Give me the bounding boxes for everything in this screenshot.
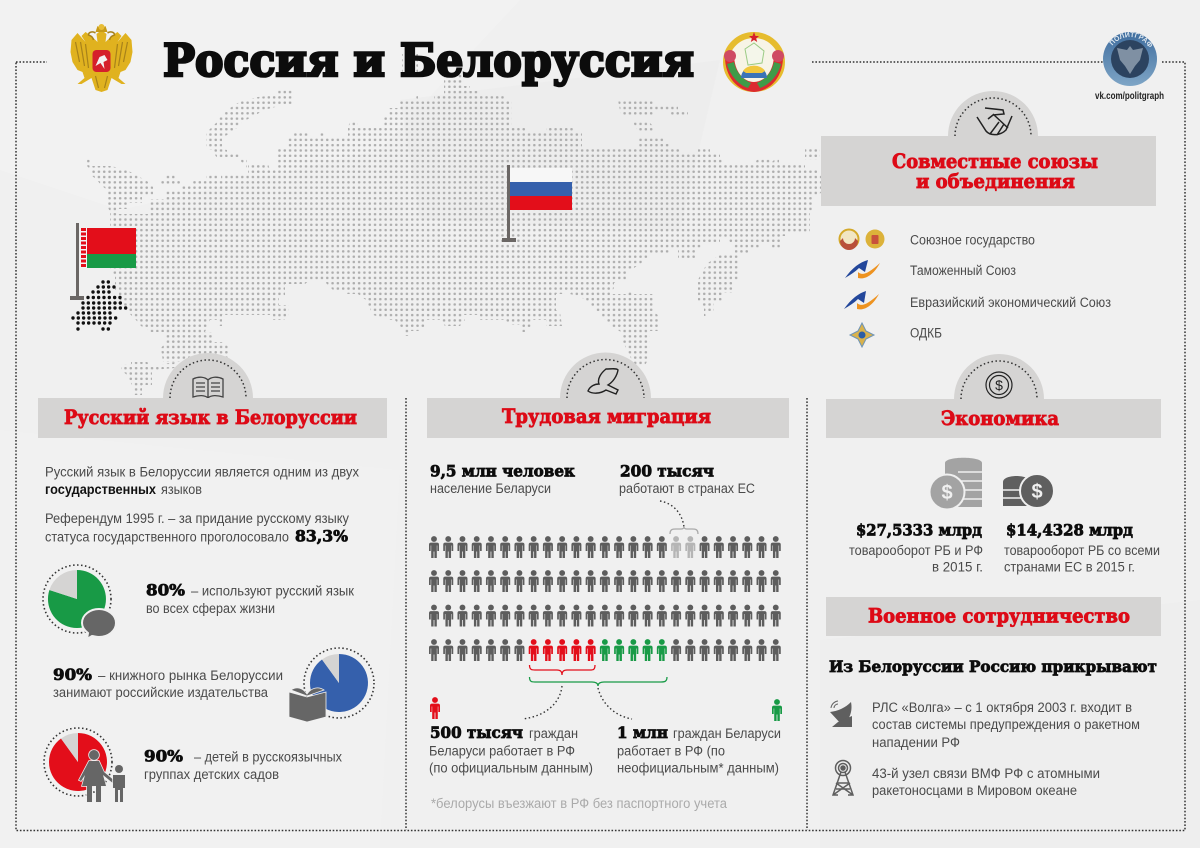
stat: trade with EU: товарооборот РБ со всеми (1004, 543, 1160, 558)
flag: Russia (502, 165, 572, 242)
stat: trade with Russia: в 2015 г. (932, 560, 983, 575)
stat: 500 thousand: Беларуси работает в РФ (429, 744, 575, 759)
panel: economy (826, 354, 1161, 575)
icon: customs union (845, 260, 880, 278)
logo eagle (1117, 46, 1143, 74)
stat: 500 thousand (429, 723, 593, 776)
footnote: *белорусы въезжают в РФ без паспортного учета (431, 796, 727, 811)
label: Евразийский экономический Союз (910, 295, 1111, 310)
icon: radar (830, 701, 852, 727)
text: 90 percent books: – книжного рынка Белоруссии (98, 668, 283, 683)
text: 90 percent books: занимают российские издательства (53, 685, 268, 700)
icon: short coin stack (1003, 474, 1054, 508)
stat: 500 thousand: 500 тысяч (430, 723, 523, 742)
stat: 1 million: 1 млн (617, 723, 668, 742)
icon: Russian arms small (866, 230, 884, 248)
icon: green person (772, 699, 782, 721)
text: 90 percent children (144, 747, 342, 782)
icon: speech bubble (82, 609, 116, 639)
heading text: и объединения (916, 170, 1075, 193)
stat: 1 million: работает в РФ (по (617, 744, 725, 759)
people grid (429, 536, 781, 661)
red bracket (530, 665, 595, 675)
text: radar: нападении РФ (872, 735, 960, 750)
green bracket (530, 677, 667, 686)
logo: politgraph (1095, 32, 1164, 102)
tab (948, 91, 1038, 136)
heading (821, 136, 1156, 206)
heading (826, 597, 1161, 636)
stat: EU workers: 200 тысяч (620, 462, 714, 481)
title: Россия и Белоруссия (163, 34, 694, 87)
icon: mother and child (79, 750, 125, 802)
referendum text: статуса государственного проголосовало (45, 530, 289, 545)
referendum text: 83,3% (295, 527, 348, 546)
icon: radio tower (833, 760, 853, 795)
heading text: Трудовая миграция (502, 405, 711, 428)
stat: 500 thousand: граждан (529, 726, 578, 741)
panel: labour migration (427, 353, 789, 811)
icon: tall coin stack: $ (941, 482, 953, 504)
label: ОДКБ (910, 326, 942, 340)
referendum text (45, 511, 349, 546)
logo: politgraph: ПОЛИТГРАФ (1109, 32, 1152, 47)
panel: Russian language (38, 353, 387, 802)
icon: CSTO (850, 323, 874, 347)
heading (427, 398, 789, 438)
pie: 80 percent (43, 565, 116, 639)
tab (163, 353, 253, 398)
subheading: Из Белоруссии Россию прикрывают (829, 657, 1157, 676)
stat: EU workers (619, 462, 755, 496)
stat: 1 million: граждан Беларуси (673, 726, 781, 741)
intro text (45, 465, 359, 497)
label: Союзное государство (910, 232, 1035, 248)
stat: trade with EU: $14,4328 млрд (1006, 521, 1133, 540)
intro text: Русский язык в Белоруссии является одним из двух (45, 465, 359, 480)
intro text: языков (161, 482, 202, 497)
icon: tall coin stack (930, 458, 982, 510)
Belarus dot map (73, 282, 127, 329)
text: comms node: 43-й узел связи ВМФ РФ с атомными (872, 766, 1100, 781)
panel: military cooperation (826, 597, 1161, 798)
stat: population (430, 462, 575, 496)
icon: book (289, 688, 326, 722)
text: 90 percent books (53, 665, 283, 700)
icon: dollar coin (986, 372, 1012, 398)
pie: 90 percent children (44, 728, 125, 802)
stat: trade with Russia: товарооборот РБ и РФ (849, 543, 983, 558)
text: 80 percent: – используют русский язык (191, 584, 354, 599)
text: radar: РЛС «Волга» – с 1 октября 2003 г. входит в (872, 700, 1132, 715)
heading text: Русский язык в Белоруссии (64, 406, 357, 429)
icon: Belarus arms small (840, 230, 858, 250)
text: radar (872, 700, 1140, 750)
stat: trade with Russia: $27,5333 млрд (856, 521, 982, 540)
icon: bird (588, 369, 618, 394)
icon: short coin stack: $ (1031, 481, 1043, 503)
text: 90 percent children: группах детских садов (144, 767, 279, 782)
text: 90 percent children: 90% (144, 747, 183, 766)
text: 90 percent children: – детей в русскоязычных (194, 750, 342, 765)
icon: red person (430, 697, 440, 719)
tab (954, 354, 1044, 399)
intro text: государственных (45, 482, 156, 497)
text: 80 percent: во всех сферах жизни (146, 601, 275, 616)
heading text: Совместные союзы (892, 150, 1098, 173)
heading (38, 398, 387, 438)
stat: trade with Russia (849, 521, 983, 575)
stat: population: 9,5 млн человек (430, 462, 575, 481)
icon: Russian coat of arms (70, 24, 132, 92)
label: Таможенный Союз (910, 263, 1016, 278)
pie: 90 percent books (289, 648, 374, 722)
dotted map of Russia (86, 54, 822, 395)
heading text (892, 150, 1098, 193)
text: comms node: ракетоносцами в Мировом океане (872, 783, 1077, 798)
text: 90 percent books: 90% (53, 665, 92, 684)
tab (560, 353, 651, 398)
heading text: Военное сотрудничество (868, 604, 1130, 627)
stat: EU workers: работают в странах ЕС (619, 481, 755, 496)
grey bracket and connector (660, 501, 698, 534)
icon: handshake (977, 108, 1012, 135)
icon: eurasian union (844, 291, 879, 309)
stat: trade with EU (1004, 521, 1160, 575)
heading text: Экономика (941, 407, 1059, 430)
text: radar: состав системы предупреждения о ракетном (872, 717, 1140, 732)
icon: open book (193, 377, 223, 398)
panel: unions (821, 91, 1156, 347)
logo ring text (1108, 37, 1152, 59)
icon: dollar coin: $ (995, 377, 1003, 393)
stat: trade with EU: странами ЕС в 2015 г. (1004, 560, 1135, 575)
stat: 1 million (617, 723, 781, 776)
stat: 500 thousand: (по официальным данным) (429, 761, 593, 776)
text: 80 percent (146, 581, 354, 616)
referendum text: Референдум 1995 г. – за придание русскому языку (45, 511, 349, 526)
stat: 1 million: неофициальным* данным) (617, 761, 779, 776)
icon: Belarus coat of arms (724, 32, 784, 92)
text: 80 percent: 80% (146, 581, 185, 600)
heading (826, 399, 1161, 438)
connectors (523, 686, 632, 719)
logo caption: vk.com/politgraph (1095, 91, 1164, 102)
flag: Belarus (70, 223, 136, 300)
text: comms node (872, 766, 1100, 798)
stat: population: население Беларуси (430, 481, 551, 496)
